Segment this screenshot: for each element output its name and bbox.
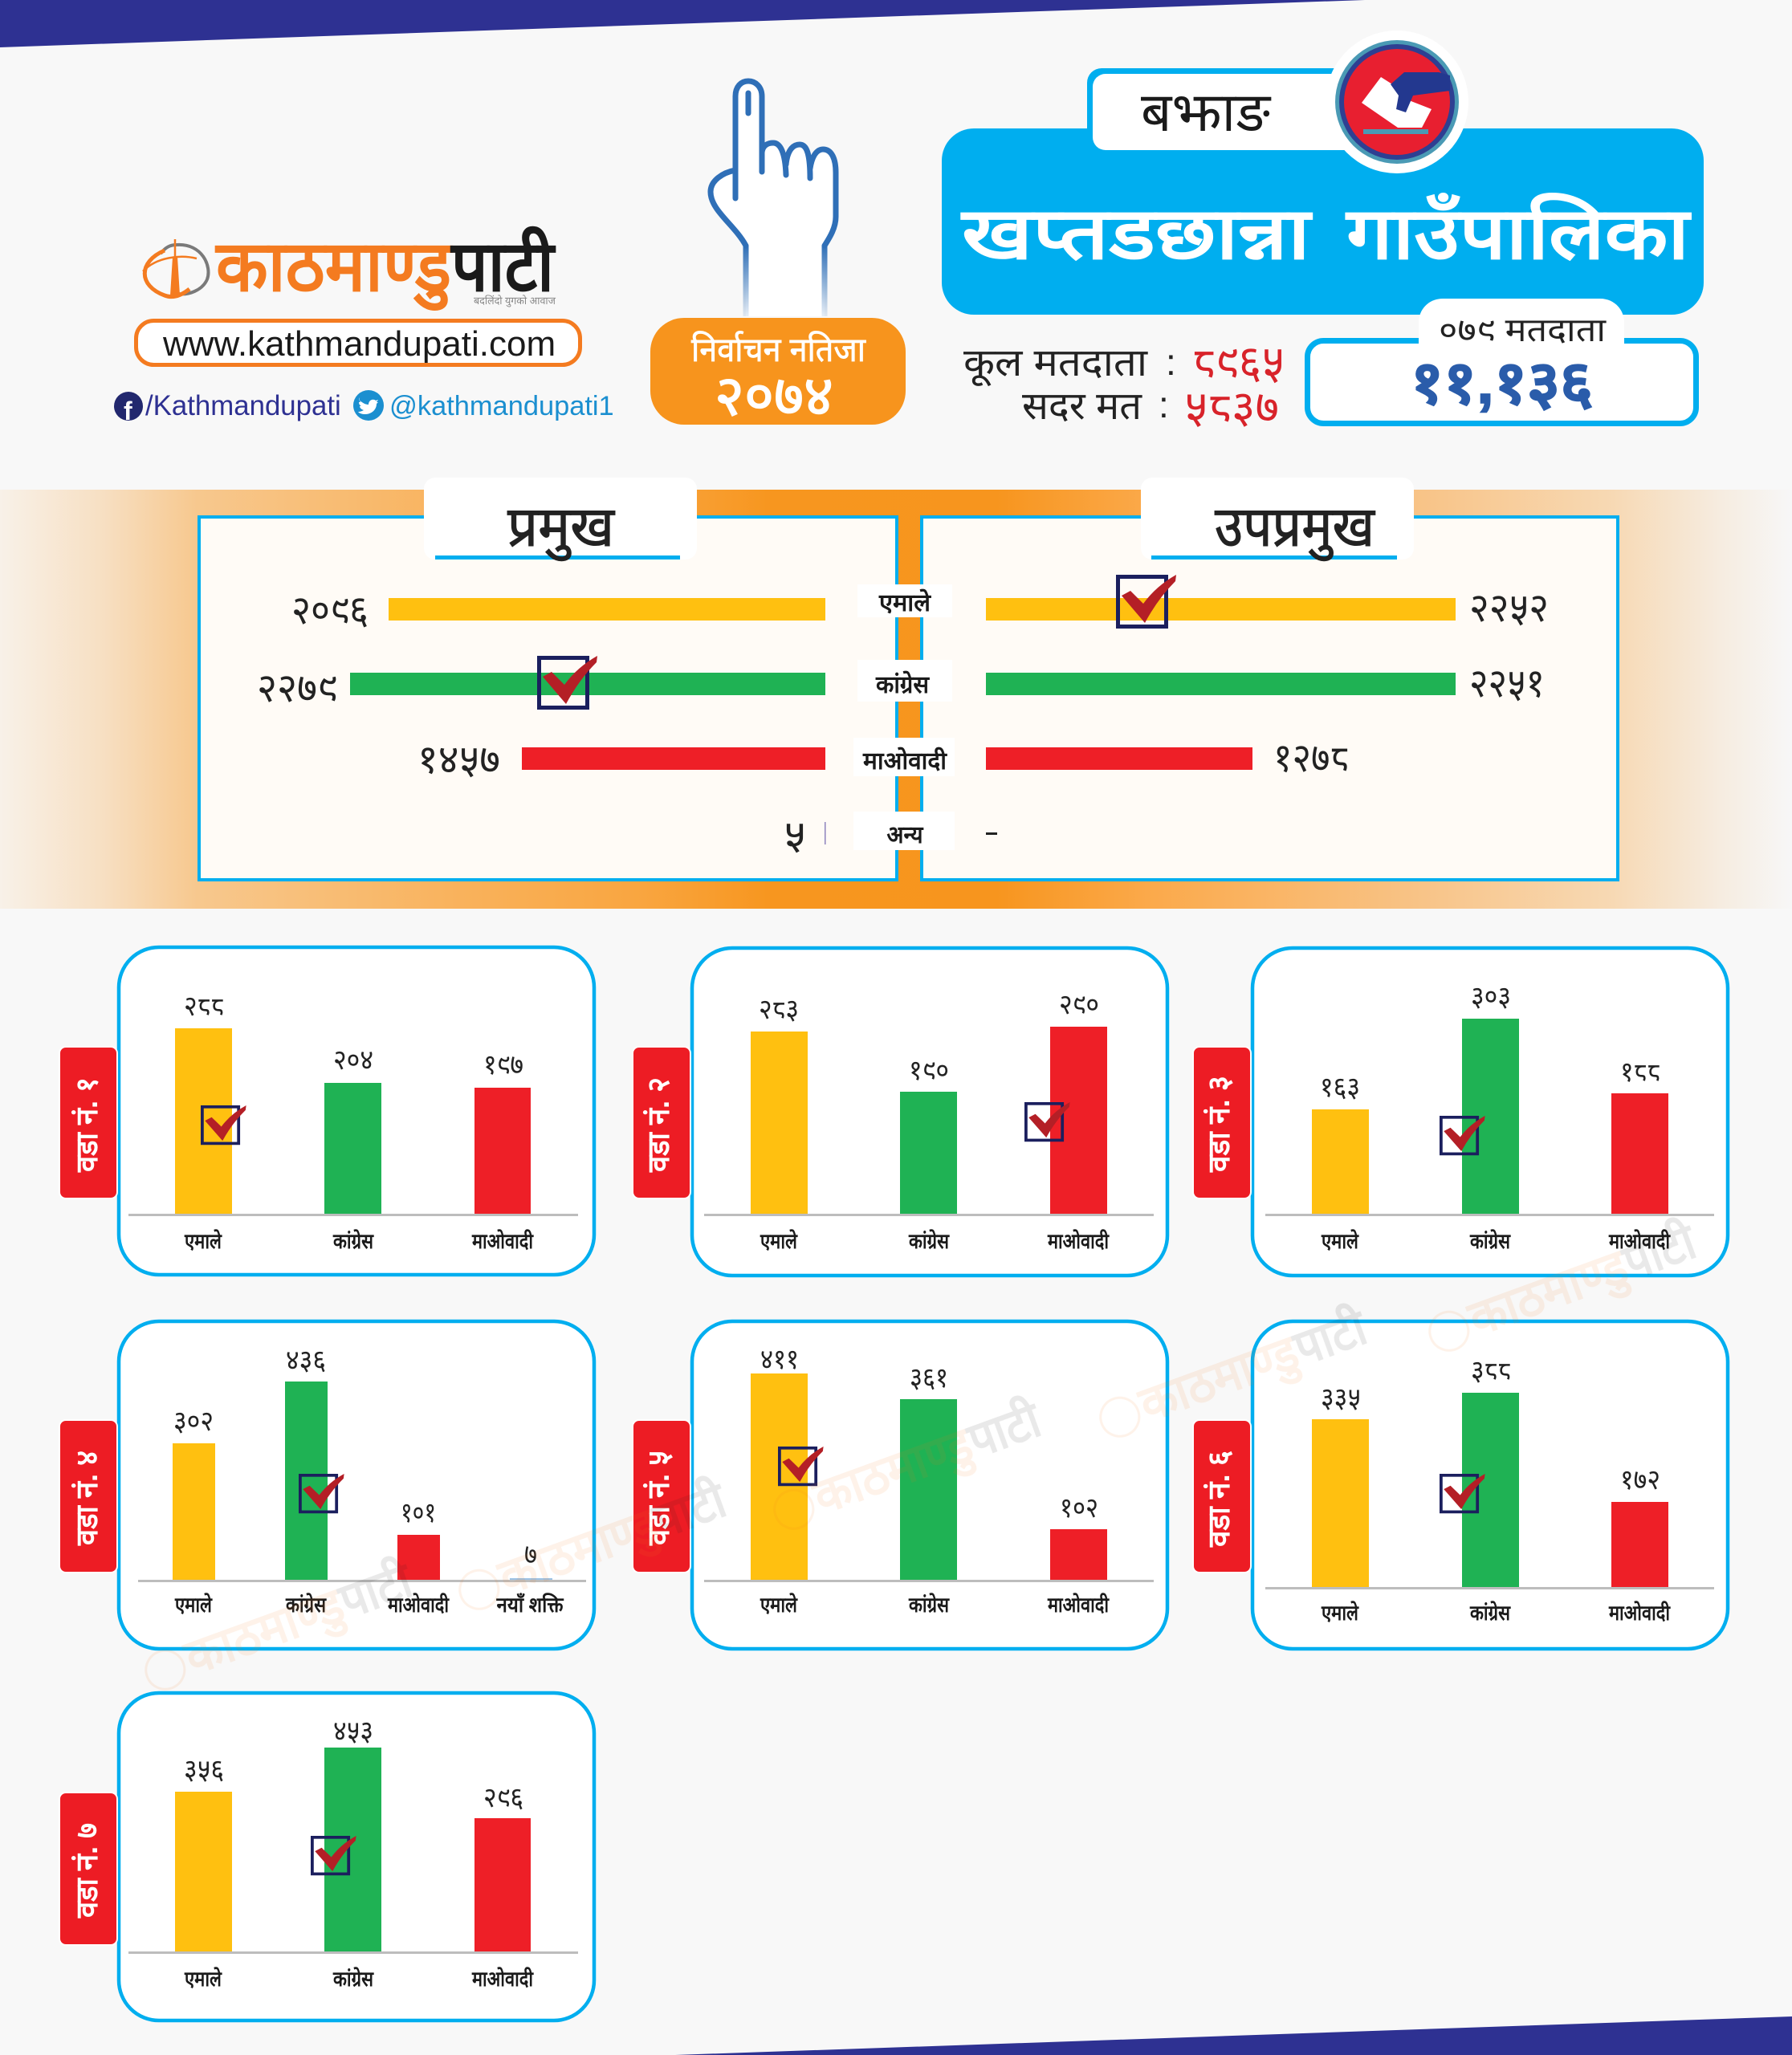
party names: नयाँ शक्ति (496, 1593, 564, 1617)
panel: 079 voters (1307, 299, 1696, 424)
watermark 3: काठमाण्डु (805, 1417, 983, 1528)
value: UML: २०९६ (291, 588, 369, 633)
logo tagline: बदलिंदो युगको आवाज (474, 295, 556, 307)
bar: Congress 361 (900, 1399, 957, 1581)
axis (704, 1214, 1154, 1216)
icon: globe and tower (143, 239, 208, 297)
watermark 1: पाटी (331, 1551, 421, 1630)
icon: facebook: f (124, 397, 132, 425)
values: २८८ (184, 991, 224, 1022)
bar: UML 335 (1312, 1419, 1369, 1588)
heading tab: upapramukh: उपप्रमुख (1215, 495, 1376, 561)
bar: UML (389, 598, 825, 621)
party names: माओवादी (471, 1967, 534, 1991)
values: ३५६ (184, 1754, 224, 1785)
municipality name (960, 192, 1692, 275)
bar: Congress 388 (1462, 1393, 1519, 1588)
values: ३०३ (1471, 981, 1511, 1012)
values: ४११ (760, 1344, 799, 1375)
panel: mayor (pramukh) (199, 478, 897, 880)
values: २९६ (483, 1782, 523, 1813)
stat: valid votes (1022, 381, 1279, 432)
winner check (1441, 1474, 1485, 1512)
tag: ward 2: वडा नं. २ (642, 1077, 676, 1173)
website url: www.kathmandupati.com (162, 324, 556, 364)
bar: Maoist 296 (474, 1818, 531, 1952)
values: ४५३ (333, 1715, 373, 1747)
values: १७२ (1620, 1464, 1660, 1495)
party names: कांग्रेस (1469, 1601, 1511, 1625)
voters label: ०७९ मतदाता (1439, 311, 1607, 348)
card: ward 7 (59, 1693, 594, 2020)
winner check (300, 1474, 344, 1512)
party names (1321, 1601, 1671, 1625)
icon: voting hand (711, 81, 836, 316)
tag: ward 1 (59, 1047, 117, 1198)
bar: Maoist 188 (1611, 1093, 1668, 1215)
watermark logos (136, 1212, 1705, 1703)
watermark 3 (765, 1390, 1050, 1543)
party names: माओवादी (1608, 1229, 1671, 1253)
party names: एमाले (174, 1593, 213, 1617)
axis (138, 1580, 586, 1582)
watermark 3: पाटी (959, 1390, 1049, 1469)
logo text orange: काठमाण्डु (214, 226, 454, 311)
logo: Kathmandupati (143, 226, 556, 311)
tag: ward 6 (1193, 1420, 1251, 1573)
values (1321, 1355, 1660, 1495)
bottom navy banner (675, 2016, 1792, 2055)
tag: ward 7 (59, 1793, 117, 1945)
municipality name: गाउँपालिका (1345, 192, 1692, 275)
party names: कांग्रेस (908, 1593, 950, 1617)
tag: ward 5 (633, 1420, 690, 1573)
card: ward 2 (633, 948, 1167, 1276)
party names: एमाले (760, 1229, 798, 1253)
winner check (540, 656, 597, 708)
bar: UML 411 (751, 1373, 808, 1581)
value: Maoist: १४५७ (417, 737, 500, 782)
label: Congress (857, 660, 952, 702)
bar: Congress (986, 673, 1456, 695)
values: ४३६ (286, 1345, 326, 1376)
twitter handle: @kathmandupati1 (389, 391, 614, 421)
party names: माओवादी (1608, 1601, 1671, 1625)
label: others: अन्य (886, 822, 924, 848)
value: Congress: २२५१ (1469, 661, 1545, 706)
party names: एमाले (760, 1593, 798, 1617)
watermark 5 (1420, 1212, 1705, 1365)
bar: UML 356 (175, 1792, 232, 1952)
tag: ward 4 (59, 1420, 117, 1573)
badge line 1: निर्वाचन नतिजा (691, 331, 866, 368)
values (1320, 981, 1660, 1103)
values (760, 1344, 1098, 1524)
values (184, 1715, 523, 1813)
winner check (780, 1447, 824, 1484)
tag: ward 2 (633, 1047, 690, 1198)
watermark 1: काठमाण्डु (177, 1577, 354, 1689)
party names: माओवादी (471, 1229, 534, 1253)
watermark 5: काठमाण्डु (1460, 1239, 1638, 1350)
values: ३३५ (1321, 1382, 1361, 1414)
stat: total voters: : (1166, 341, 1176, 383)
tag: ward 7: वडा नं. ७ (71, 1823, 104, 1919)
values: १९७ (483, 1049, 523, 1080)
bar: Congress 303 (1462, 1019, 1519, 1215)
values: ३६१ (910, 1362, 948, 1394)
winner check (1441, 1116, 1485, 1154)
social handles (114, 390, 614, 425)
icon: ballot emblem (1326, 31, 1468, 173)
axis (1265, 1214, 1714, 1216)
bar: Maoist 172 (1611, 1502, 1668, 1588)
party names: कांग्रेस (332, 1229, 374, 1253)
party names: माओवादी (387, 1593, 450, 1617)
logo text black: पाटी (450, 226, 556, 306)
winner check (1026, 1102, 1070, 1140)
tag: ward 1: वडा नं. १ (71, 1077, 104, 1173)
values: १०२ (1060, 1492, 1098, 1524)
values: ३०२ (173, 1406, 214, 1437)
label: UML (857, 584, 952, 617)
value: Congress: २२७९ (257, 665, 337, 710)
party names: कांग्रेस (1469, 1229, 1511, 1253)
party names: एमाले (184, 1229, 222, 1253)
district tab (1093, 74, 1358, 150)
facebook handle: /Kathmandupati (145, 390, 341, 421)
watermark 5: पाटी (1615, 1212, 1704, 1291)
bar: Congress 190 (900, 1092, 957, 1215)
card: ward 4 (59, 1321, 594, 1649)
bar: Maoist 101 (397, 1535, 440, 1581)
tag: ward 4: वडा नं. ४ (71, 1451, 104, 1546)
district tab border (1087, 68, 1352, 149)
label: others (853, 812, 955, 850)
panel: deputy (upapramukh) (922, 478, 1618, 880)
value: UML: २२५२ (1469, 585, 1549, 630)
party names: कांग्रेस (332, 1967, 374, 1991)
values: २८३ (759, 994, 799, 1025)
party names: कांग्रेस (908, 1229, 950, 1253)
values (759, 989, 1099, 1086)
bar: UML 302 (173, 1443, 215, 1581)
tag: ward 3 (1193, 1047, 1251, 1198)
value: others: ५ (784, 812, 806, 857)
bar: Congress 453 (324, 1748, 381, 1952)
bar: Maoist (522, 747, 825, 770)
bar: Congress 204 (324, 1083, 381, 1215)
website pill (136, 321, 580, 364)
values: १८८ (1620, 1056, 1660, 1088)
values: २९० (1059, 989, 1099, 1020)
values (184, 991, 523, 1080)
party names: माओवादी (1047, 1593, 1110, 1617)
watermark 2: काठमाण्डु (491, 1497, 668, 1609)
values: १९० (909, 1055, 949, 1086)
party names (1321, 1229, 1671, 1253)
watermark 4 (1091, 1298, 1376, 1451)
heading tab: pramukh: प्रमुख (507, 495, 616, 561)
label: UML: एमाले (878, 588, 932, 616)
municipality name: खप्तडछान्ना (960, 194, 1313, 275)
bar: Maoist 290 (1050, 1027, 1107, 1215)
axis (128, 1214, 578, 1216)
party names (174, 1593, 564, 1617)
tag: ward 3: वडा नं. ३ (1203, 1076, 1236, 1173)
bar: UML 288 (175, 1028, 232, 1215)
bar: UML 283 (751, 1032, 808, 1215)
winner check (1118, 575, 1176, 626)
bar: UML 163 (1312, 1109, 1369, 1215)
stat: total voters: ८९६५ (1192, 336, 1285, 389)
party names: एमाले (1321, 1229, 1359, 1253)
orange band (0, 490, 1792, 909)
tag: ward 5: वडा नं. ५ (642, 1451, 676, 1546)
watermark 4: पाटी (1285, 1298, 1375, 1377)
card: ward 6 (1193, 1321, 1728, 1649)
values (173, 1345, 537, 1570)
watermark 2: पाटी (645, 1471, 735, 1549)
top navy banner (0, 0, 1365, 47)
watermark 1 (136, 1551, 422, 1703)
party names (760, 1229, 1110, 1253)
party names: माओवादी (1047, 1229, 1110, 1253)
party names: कांग्रेस (285, 1593, 327, 1617)
winner check (202, 1105, 246, 1143)
watermark 4: काठमाण्डु (1131, 1325, 1309, 1436)
values: २०४ (333, 1044, 373, 1076)
bar: Congress 436 (285, 1382, 328, 1581)
label: Maoist: माओवादी (862, 747, 947, 775)
card: ward 3 (1193, 948, 1728, 1276)
badge year: २०७४ (715, 364, 833, 427)
heading tab: upapramukh (1141, 478, 1414, 561)
bar: Maoist 197 (474, 1088, 531, 1215)
watermark 2 (450, 1471, 735, 1623)
values: ३८८ (1471, 1355, 1511, 1386)
axis (128, 1951, 578, 1954)
bar: Congress (350, 673, 825, 695)
badge: election result 2074 (650, 318, 906, 427)
label: Maoist (853, 738, 955, 776)
bar: UML (986, 598, 1456, 621)
voters number: ११,१३६ (1411, 349, 1593, 416)
stat: valid votes: : (1159, 384, 1169, 425)
icon: twitter (353, 390, 384, 421)
party names (184, 1229, 534, 1253)
label: Congress: कांग्रेस (875, 670, 931, 698)
party names (760, 1593, 1110, 1617)
bar: Maoist 102 (1050, 1529, 1107, 1581)
party names (184, 1967, 534, 1991)
card: ward 5 (633, 1321, 1167, 1649)
values: ७ (524, 1539, 537, 1570)
value: Maoist: १२७८ (1273, 735, 1349, 780)
party labels center (853, 584, 955, 850)
stat: total voters (963, 336, 1285, 389)
values: १६३ (1320, 1072, 1360, 1103)
value: others dash (986, 832, 997, 835)
card: ward 1 (59, 947, 594, 1275)
stat: valid votes: ५८३७ (1184, 381, 1279, 432)
bar: Naya Shakti 7 (510, 1578, 552, 1581)
stat: valid votes: सदर मत (1022, 385, 1143, 428)
axis (1265, 1587, 1714, 1589)
icon: facebook (114, 392, 143, 425)
tag: ward 6: वडा नं. ६ (1203, 1451, 1236, 1548)
district name: बझाङ (1141, 82, 1272, 143)
winner check (312, 1836, 356, 1874)
panel: municipality title (942, 128, 1704, 315)
values: १०१ (401, 1497, 436, 1528)
party names: एमाले (1321, 1601, 1359, 1625)
heading tab: pramukh (424, 478, 697, 561)
bar: Maoist (986, 747, 1252, 770)
party names: एमाले (184, 1967, 222, 1991)
stat: total voters: कूल मतदाता (963, 342, 1149, 387)
axis (704, 1580, 1154, 1582)
